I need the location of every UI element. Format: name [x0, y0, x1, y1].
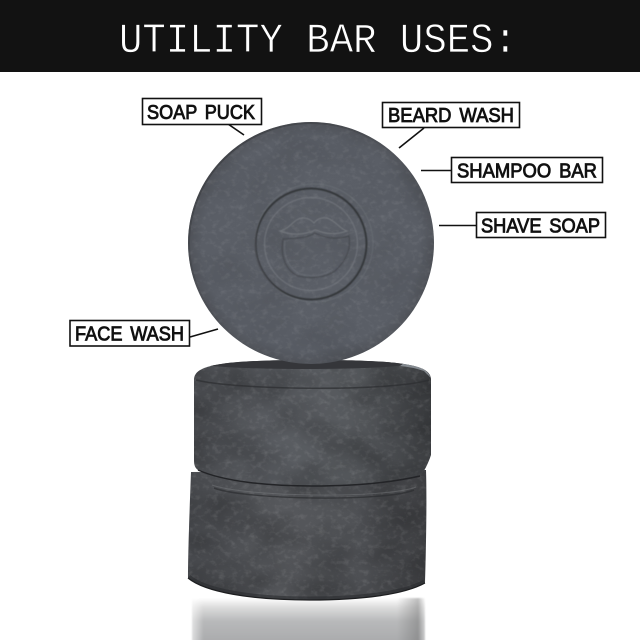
label: soap puck: [142, 98, 262, 135]
embossed ring logo: [255, 184, 373, 302]
label: beard wash: BEARD WASH: [388, 105, 514, 127]
top soap puck face: [186, 120, 436, 366]
header banner: [0, 0, 640, 72]
label: shampoo bar: [421, 158, 602, 182]
label: shave soap: SHAVE SOAP: [481, 216, 600, 238]
label: face wash: FACE WASH: [75, 324, 184, 346]
middle soap puck: [190, 358, 435, 488]
icon: moustache and beard: [280, 218, 349, 278]
bottom soap puck: [185, 468, 430, 602]
label: face wash: [70, 320, 218, 346]
label: shave soap: [439, 212, 606, 238]
title: UTILITY BAR USES:: [119, 17, 517, 65]
label: shampoo bar: SHAMPOO BAR: [457, 160, 597, 182]
label: soap puck: SOAP PUCK: [147, 102, 256, 124]
reflection below the soap stack: [192, 598, 425, 640]
label: beard wash: [382, 102, 520, 148]
